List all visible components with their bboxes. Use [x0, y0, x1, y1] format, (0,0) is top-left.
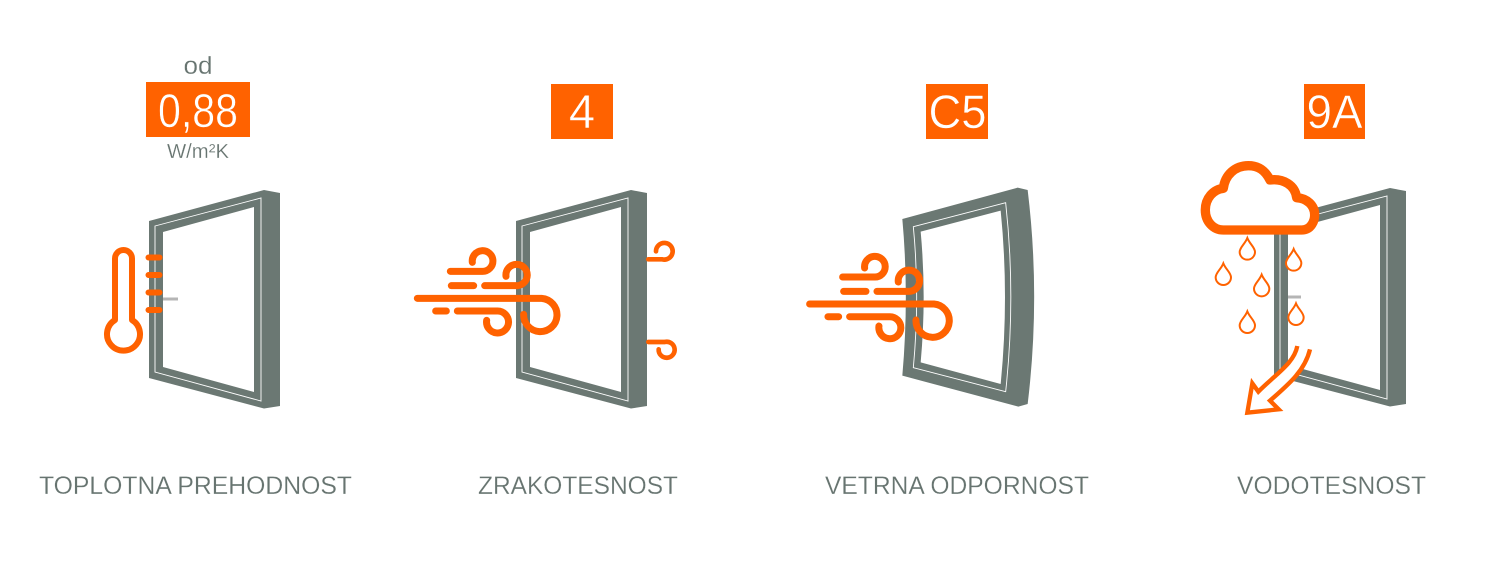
badge: 9A: 9A: [1306, 85, 1363, 138]
panel: water tightness: [1205, 84, 1426, 500]
icon: window frame: [149, 190, 280, 408]
badge: C5: C5: [928, 85, 986, 138]
badge: 0,88: 0,88: [158, 84, 238, 137]
icon: cloud: [1205, 166, 1315, 230]
label: water tightness: VODOTESNOST: [1237, 472, 1426, 500]
arrow: water run-off: [1247, 346, 1310, 413]
text: unit: W/m²K: [167, 141, 230, 163]
icon: thermometer: [107, 250, 160, 351]
label: air tightness: ZRAKOTESNOST: [478, 472, 678, 500]
icon: curved window frame: [902, 188, 1034, 407]
label: thermal transmittance: TOPLOTNA PREHODNOST: [39, 472, 352, 500]
panel: air tightness: [417, 84, 678, 500]
badge: 4: 4: [569, 85, 595, 138]
icon: rain drops: [1216, 238, 1304, 333]
panel: wind resistance: [810, 84, 1089, 500]
icon: rain cloud and arrow: [1205, 166, 1315, 413]
icon: window frame: [1274, 188, 1406, 406]
text: od: od: [184, 52, 212, 80]
panel: thermal transmittance: [39, 52, 352, 500]
icon: small wind exits: [648, 243, 675, 358]
icon: wind: [417, 251, 557, 333]
label: wind resistance: VETRNA ODPORNOST: [825, 472, 1089, 500]
badge: 4: [551, 84, 613, 139]
icon: window frame: [516, 190, 647, 408]
icon: wind: [810, 256, 949, 339]
